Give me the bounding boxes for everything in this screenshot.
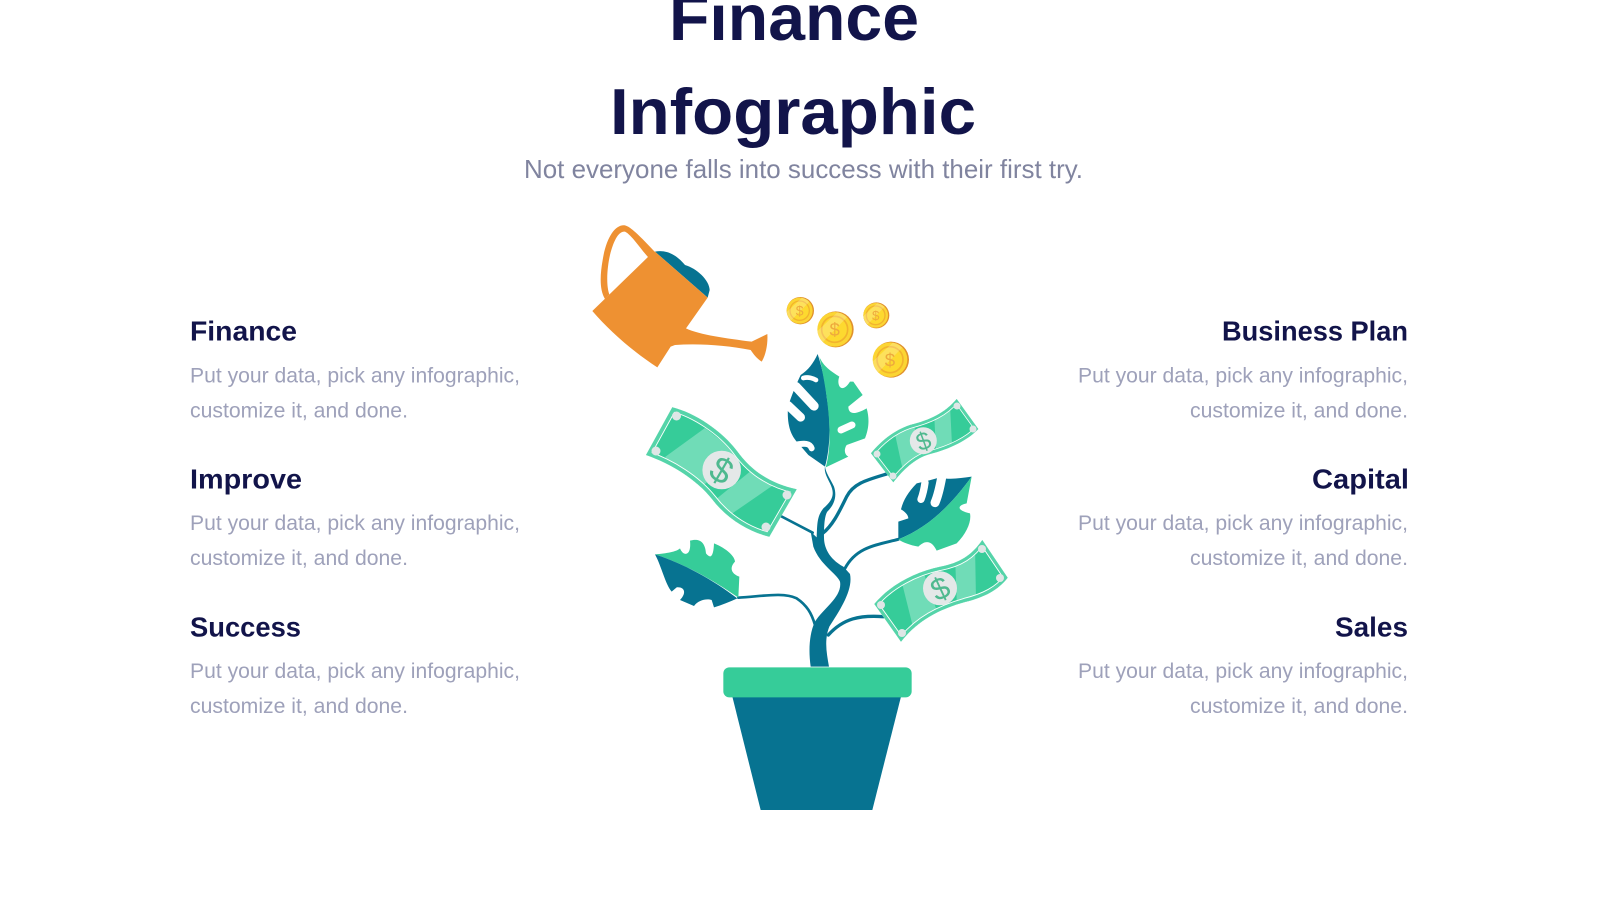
coin 3: $: [872, 308, 880, 323]
text block: Improve: Improve: [190, 464, 302, 494]
icon: watering can: [592, 225, 767, 367]
icon: coins: [783, 295, 909, 378]
text block: Success: [190, 612, 520, 718]
text block: Finance: Finance: [190, 316, 297, 346]
icon: left leaf: [655, 540, 739, 607]
text block: Improve: Put your data, pick any infographic,: [190, 512, 520, 535]
text block: Improve: customize it, and done.: [190, 547, 408, 570]
text block: Sales: [1078, 612, 1408, 718]
text block: Sales: customize it, and done.: [1190, 695, 1408, 718]
text block: Business Plan: Business Plan: [1222, 316, 1408, 346]
text block: Success: Success: [190, 612, 301, 642]
icon: top right banknote: [871, 399, 978, 482]
text block: Finance: [190, 316, 520, 422]
text block: Improve: [190, 464, 520, 570]
text block: Capital: customize it, and done.: [1190, 547, 1408, 570]
text block: Business Plan: [1078, 316, 1408, 422]
icon: large left banknote: $: [703, 447, 741, 493]
icon: flower pot: [723, 667, 912, 810]
text block: Capital: Put your data, pick any infographic,: [1078, 512, 1408, 535]
text block: Capital: [1078, 464, 1409, 570]
text block: Success: Put your data, pick any infographic,: [190, 660, 520, 683]
icon: right leaf: [898, 477, 972, 551]
title: [610, 0, 976, 148]
text block: Finance: customize it, and done.: [190, 400, 408, 422]
subtitle: Not everyone falls into success with their first try.: [524, 154, 1083, 184]
icon: top leaf: [788, 354, 868, 467]
icon: large left banknote: [646, 407, 797, 537]
text block: Business Plan: Put your data, pick any infographic,: [1078, 364, 1408, 388]
icon: top right banknote: $: [912, 426, 935, 457]
coin 2: $: [829, 319, 840, 340]
text block: Capital: Capital: [1312, 464, 1409, 494]
coin 4: $: [885, 349, 896, 370]
title: Infographic: [610, 75, 976, 148]
text block: Sales: Sales: [1335, 612, 1408, 642]
text block: Sales: Put your data, pick any infographic,: [1078, 660, 1408, 683]
coin 1: $: [796, 303, 804, 319]
text block: Success: customize it, and done.: [190, 695, 408, 718]
icon: bottom right banknote: [874, 540, 1008, 642]
text block: Finance: Put your data, pick any infographic,: [190, 364, 520, 388]
plant stem and branches: [738, 467, 898, 667]
text block: Business Plan: customize it, and done.: [1190, 400, 1408, 422]
icon: bottom right banknote: $: [925, 569, 955, 608]
